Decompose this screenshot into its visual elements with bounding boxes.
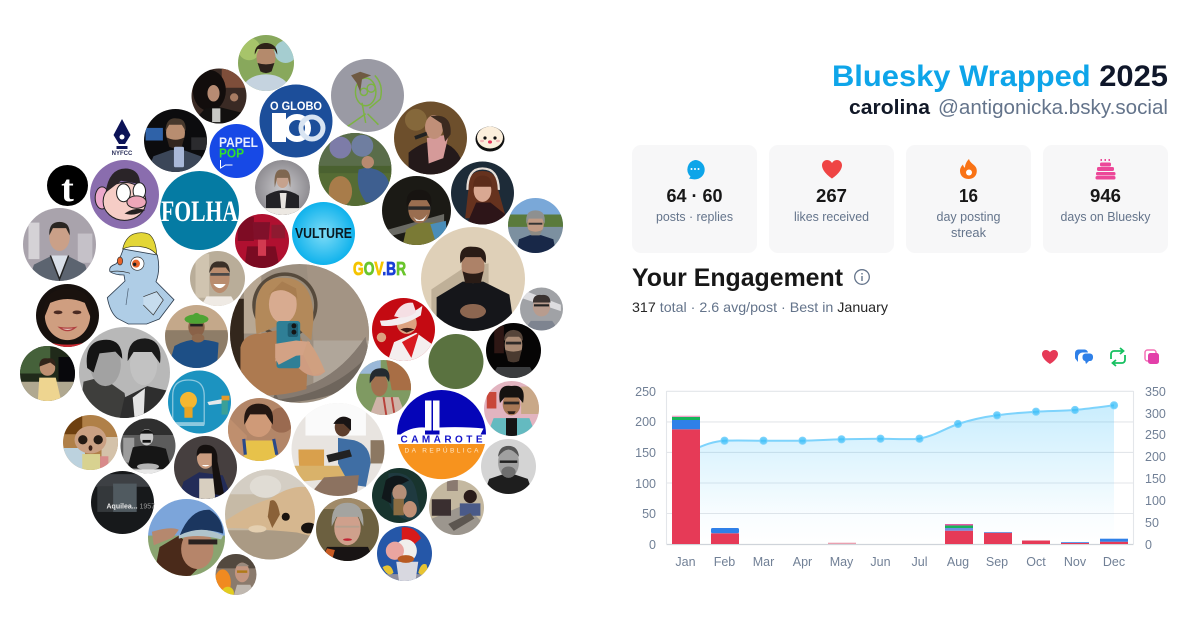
heading: Your Engagement: Your Engagement bbox=[632, 264, 844, 292]
avatar: curly man in teal shirt bbox=[484, 381, 539, 436]
avatar: FOLHA logo bbox=[160, 171, 239, 250]
chart legend bbox=[1042, 348, 1159, 366]
bar: Feb bbox=[711, 528, 739, 544]
icon: birthday cake bbox=[1096, 159, 1116, 180]
avatar: blue cartoon creature with yellow crest bbox=[107, 233, 174, 324]
avatar: woman with short gray hair bbox=[316, 498, 379, 561]
avatar: bald man black and white bbox=[481, 439, 536, 494]
panel: days on Bluesky bbox=[1043, 145, 1168, 253]
bar: May bbox=[828, 543, 856, 544]
avatar: woman with magazines on table bbox=[429, 480, 484, 535]
avatar: cartoon rooster with bubblegum bbox=[377, 526, 432, 582]
avatar: man with glasses smiling bbox=[382, 176, 451, 245]
icon: likes heart bbox=[1042, 350, 1058, 364]
month labels: Apr bbox=[793, 555, 812, 569]
icon: replies bubbles bbox=[1075, 349, 1093, 364]
panel: posting streak: day posting bbox=[936, 209, 1000, 224]
left axis labels: 100 bbox=[635, 477, 656, 491]
month labels bbox=[675, 555, 1125, 569]
avatar: Camarote da República logo: CAMAROTE bbox=[400, 434, 483, 446]
avatar: FOLHA logo: FOLHA bbox=[161, 195, 238, 228]
left axis labels bbox=[635, 385, 656, 552]
avatar: Papel Pop logo bbox=[210, 124, 264, 178]
icon: info bbox=[855, 270, 869, 284]
month labels: May bbox=[830, 555, 854, 569]
bar: Aug bbox=[945, 524, 973, 544]
panel: days on Bluesky: 946 bbox=[1090, 186, 1121, 206]
avatar: Vulture logo: VULTURE bbox=[295, 225, 352, 242]
subtitle: name and handle: @antigonicka.bsky.social bbox=[938, 97, 1168, 119]
avatar: Papel Pop logo: POP bbox=[219, 146, 244, 160]
avatar: Camarote da República logo: DA REPÚBLICA bbox=[404, 446, 479, 454]
avatar: O Globo 100 logo: O GLOBO bbox=[270, 101, 322, 113]
bar: Sep bbox=[984, 532, 1012, 544]
right axis labels bbox=[1145, 385, 1166, 552]
month labels: Feb bbox=[714, 555, 735, 569]
avatar: O Globo 100 logo bbox=[260, 84, 332, 158]
right axis labels: 300 bbox=[1145, 407, 1166, 421]
avatar: NYFCC pen nib logo: NYFCC bbox=[112, 151, 133, 157]
right axis labels: 0 bbox=[1145, 538, 1152, 552]
month labels: Nov bbox=[1064, 555, 1087, 569]
left axis labels: 150 bbox=[635, 446, 656, 460]
panel: posts and replies bbox=[632, 145, 757, 253]
avatar: gray haired man by lake bbox=[508, 198, 563, 254]
right axis labels: 100 bbox=[1145, 494, 1166, 508]
avatar: woman in black blazer bbox=[255, 160, 310, 216]
avatar: smiling man with glasses in church bbox=[190, 251, 245, 306]
panel: posting streak: 16 bbox=[959, 186, 978, 206]
avatar: man with striped background bbox=[520, 288, 563, 330]
avatar: woman with red top bbox=[36, 284, 99, 347]
panel: likes received: likes received bbox=[794, 209, 869, 224]
right axis labels: 150 bbox=[1145, 472, 1166, 486]
avatar: red toned statue bbox=[235, 214, 289, 268]
avatar: cartoon man in white hat bbox=[372, 298, 435, 361]
icon: heart bbox=[822, 160, 842, 178]
icon: flame bbox=[960, 159, 977, 179]
avatar: Groucho black and white bbox=[120, 418, 176, 475]
avatar: man with green hat bbox=[165, 305, 228, 368]
avatar: gov.br logo: GOV.BR bbox=[353, 259, 406, 279]
avatar: girl with bangs and headband bbox=[451, 162, 514, 224]
avatar: man with dog in garden bbox=[318, 133, 392, 207]
right axis labels: 200 bbox=[1145, 450, 1166, 464]
avatar: Vulture logo bbox=[292, 202, 355, 265]
panel: days on Bluesky: days on Bluesky bbox=[1060, 209, 1151, 224]
avatar: letter t logo bbox=[47, 165, 88, 210]
right axis labels: 250 bbox=[1145, 428, 1166, 442]
avatar: two men black and white bbox=[79, 327, 170, 418]
subtitle: name and handle: carolina bbox=[849, 97, 931, 119]
month labels: Jul bbox=[912, 555, 927, 569]
avatar: plain olive green circle bbox=[428, 334, 484, 389]
icon: quotes squares bbox=[1145, 350, 1159, 364]
month labels: Aug bbox=[947, 555, 969, 569]
avatar: curly haired woman bbox=[192, 68, 246, 124]
avatar: man with beard and glasses dark background bbox=[486, 323, 541, 378]
avatar: dark city with caption: 1957 bbox=[140, 504, 155, 510]
avatar: dark city with caption: Aquilea... bbox=[106, 504, 138, 510]
title: Bluesky Wrapped 2025 bbox=[832, 60, 1168, 93]
panel: posts and replies: posts · replies bbox=[656, 209, 733, 224]
avatar: lightbulb in birdcage illustration bbox=[168, 370, 231, 434]
panel: likes received: 267 bbox=[816, 186, 847, 206]
avatar: selfie man with phone bbox=[144, 109, 207, 172]
panel: posting streak bbox=[906, 145, 1031, 253]
month labels: Sep bbox=[986, 555, 1008, 569]
avatar: woman in navy blazer bbox=[174, 436, 237, 499]
month labels: Oct bbox=[1026, 555, 1046, 569]
bar: Oct bbox=[1022, 540, 1050, 544]
avatar: purple cartoon man with glasses bbox=[90, 160, 159, 229]
avatar: man in striped shirt outdoors bbox=[356, 360, 411, 415]
avatar: man with beard outdoors bbox=[238, 35, 294, 91]
month labels: Dec bbox=[1103, 555, 1125, 569]
bar: Dec bbox=[1100, 539, 1128, 544]
engagement chart bbox=[635, 385, 1166, 569]
avatar: woman in blue cap bbox=[148, 499, 225, 578]
avatar: woman selfie main large bbox=[230, 264, 369, 403]
avatar: fluffy dog on couch bbox=[225, 470, 316, 562]
line points bbox=[721, 402, 1118, 444]
right axis labels: 50 bbox=[1145, 516, 1159, 530]
avatar: man in denim jacket with book bbox=[292, 403, 384, 496]
avatar: green stick figure sketch bbox=[331, 59, 404, 132]
avatar: bao bun icon bbox=[476, 126, 504, 152]
panel: posts and replies: 64 · 60 bbox=[666, 186, 722, 206]
panel: posting streak: streak bbox=[951, 225, 986, 240]
left axis labels: 250 bbox=[635, 385, 656, 399]
stacked bars bbox=[672, 416, 1128, 544]
cumulative area bbox=[686, 405, 1114, 544]
left axis labels: 200 bbox=[635, 415, 656, 429]
left axis labels: 0 bbox=[649, 538, 656, 552]
avatar: Camarote da República logo bbox=[397, 390, 486, 479]
bar: Jan bbox=[672, 416, 700, 544]
month labels: Jan bbox=[675, 555, 696, 569]
avatar: woman singing with scarf bbox=[394, 102, 467, 174]
avatar: person with coffee cup dark teal bbox=[372, 468, 427, 523]
avatar: toddler in yellow tank top bbox=[228, 398, 294, 461]
panel: likes received bbox=[769, 145, 894, 253]
avatar: baby in yellow bbox=[20, 346, 75, 401]
month labels: Mar bbox=[753, 555, 774, 569]
avatar cluster bbox=[20, 35, 563, 599]
right axis labels: 350 bbox=[1145, 385, 1166, 399]
month labels: Jun bbox=[870, 555, 891, 569]
icon: reposts arrows bbox=[1111, 348, 1125, 366]
avatar: smiling man in gray sweater bbox=[23, 208, 96, 281]
left axis labels: 50 bbox=[642, 507, 656, 521]
cumulative line bbox=[686, 405, 1114, 453]
avatar: man in black sweater beige wall bbox=[421, 227, 525, 331]
engagement summary: 317 total · 2.6 avg/post · Best in January bbox=[632, 299, 888, 315]
avatar: small man orange shape bbox=[216, 554, 256, 595]
avatar: plush toy meerkat bbox=[63, 415, 118, 471]
avatar: Papel Pop logo: PAPEL bbox=[219, 135, 258, 150]
bar: Nov bbox=[1061, 542, 1089, 544]
avatar: letter t logo: t bbox=[61, 168, 74, 210]
avatar: dark city with caption bbox=[91, 471, 155, 534]
icon: speech bubble bbox=[687, 160, 705, 179]
avatar: NYFCC pen nib logo bbox=[112, 119, 133, 157]
